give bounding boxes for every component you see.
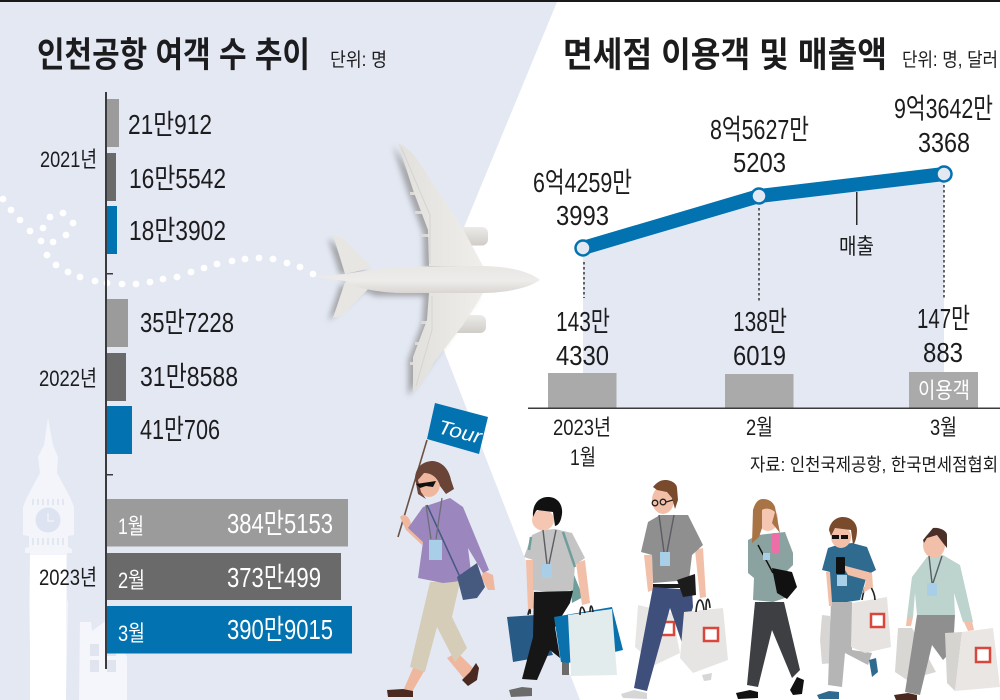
bar chart: Incheon passengers: 41만706	[140, 414, 220, 445]
customer values: 4330	[556, 340, 609, 371]
illustration: guide with flag	[387, 461, 495, 697]
bar chart: Incheon passengers: 21만912	[128, 109, 212, 140]
callout: sales label	[839, 192, 874, 259]
customer values: 143만	[556, 306, 610, 337]
heading: duty free: 면세점 이용객 및 매출액	[563, 36, 887, 75]
customer values	[556, 303, 970, 371]
customer values: 883	[923, 337, 963, 368]
illustration: shopper with black hair	[507, 497, 623, 697]
bar chart: Incheon passengers: 16만5542	[129, 163, 226, 194]
sales values: 8억5627만	[710, 114, 809, 145]
x axis labels: 2023년	[553, 415, 611, 440]
sales values: 5203	[733, 147, 786, 178]
sales values: 6억4259만	[533, 167, 632, 198]
bar chart: Incheon passengers: 3월	[118, 621, 145, 646]
bar chart: Incheon passengers: 384만5153	[227, 508, 333, 539]
sales values: 3993	[556, 200, 609, 231]
panel: pale blue background wedge	[0, 2, 580, 700]
icon: airplane	[317, 143, 540, 396]
illustration: shopper with glasses	[621, 480, 728, 699]
illustration: shopper with phone	[736, 499, 804, 699]
year label 2021: 2021년	[40, 147, 97, 172]
bar chart: Incheon passengers: 18만3902	[129, 215, 226, 246]
dotted drop lines	[584, 185, 944, 301]
bars: duty free customers: 이용객	[918, 378, 970, 403]
illustration: older shopper with bags	[894, 528, 1000, 700]
bar chart: Incheon passengers: 373만499	[227, 562, 321, 593]
bar chart: Incheon passengers: 35만7228	[140, 307, 234, 338]
sales values	[533, 93, 993, 231]
sales values: 3368	[918, 127, 970, 158]
year label 2023: 2023년	[39, 565, 97, 590]
x axis labels	[553, 415, 957, 470]
bar chart: Incheon passengers: 1월	[118, 514, 144, 539]
year label 2022: 2022년	[39, 366, 97, 391]
flight path dotted trail	[0, 196, 316, 287]
x axis labels: 1월	[570, 445, 596, 470]
bar chart: Incheon passengers	[39, 92, 352, 669]
area under sales line	[583, 174, 944, 408]
icon: tour flag: Tour	[436, 417, 485, 449]
line chart: sales	[576, 166, 952, 256]
top black rule	[0, 0, 1000, 2]
callout: sales label: 매출	[839, 234, 874, 259]
customer values: 147만	[917, 303, 970, 334]
customer values: 6019	[733, 340, 786, 371]
x axis labels: 2월	[746, 415, 773, 440]
icon: Big Ben and house silhouette	[23, 418, 127, 700]
heading: passenger trend: 인천공항 여객 수 추이	[37, 36, 310, 75]
illustration: shopper in blue shirt	[817, 517, 891, 699]
icon: tour flag	[398, 403, 488, 537]
bar chart: Incheon passengers: 31만8588	[140, 361, 238, 392]
bars: duty free customers	[528, 372, 1000, 409]
customer values: 138만	[733, 306, 787, 337]
bar chart: Incheon passengers: 390만9015	[227, 614, 333, 645]
x axis labels: 3월	[930, 415, 957, 440]
bar chart: Incheon passengers: 2월	[118, 568, 145, 593]
unit label: left chart: 단위: 명	[330, 49, 387, 71]
